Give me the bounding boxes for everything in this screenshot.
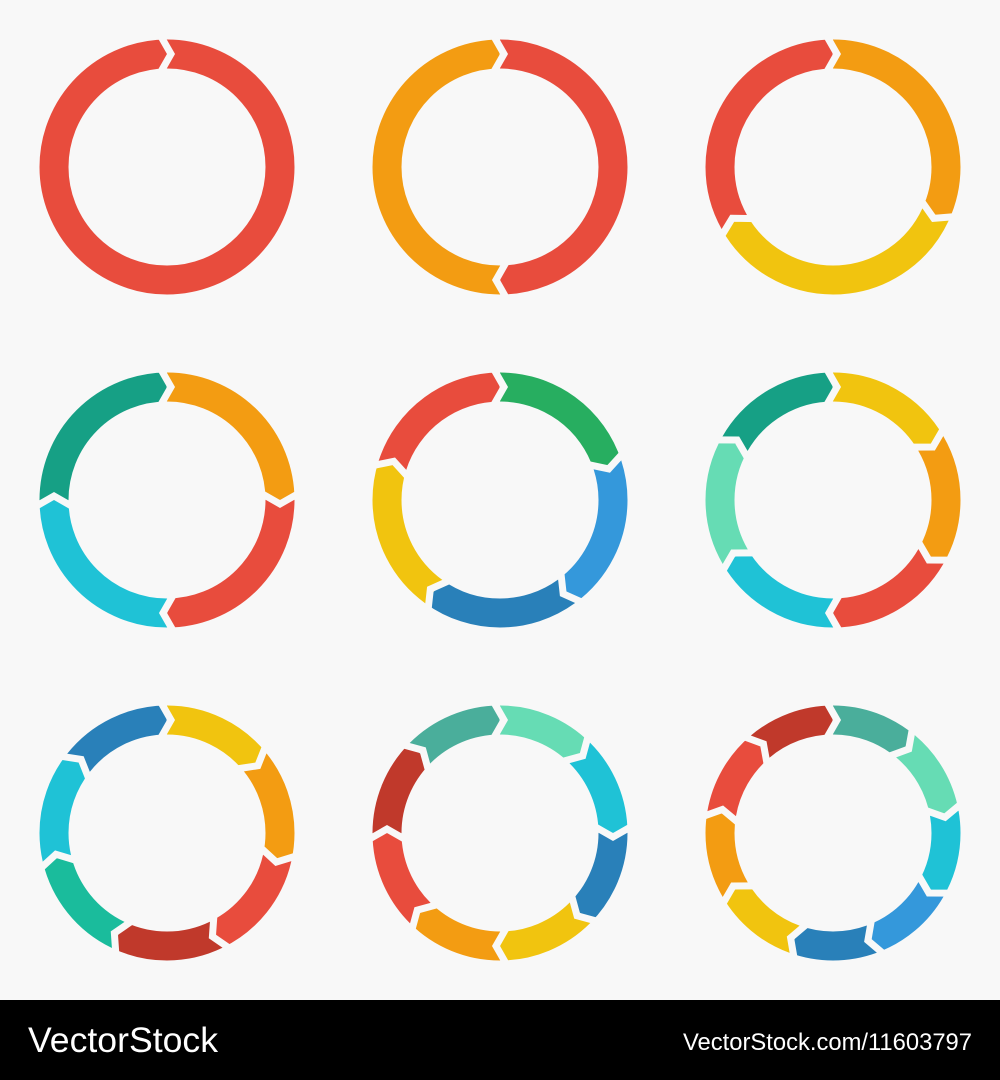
ring 6: six segments <box>713 366 953 634</box>
ring 5: five segments <box>370 366 629 613</box>
ring 7: seven segments <box>35 699 299 957</box>
ring 8: eight segments <box>366 699 634 967</box>
ring 9: nine segments <box>700 699 966 962</box>
footer logo text: VectorStock <box>28 1021 219 1060</box>
ring 2: two segments <box>387 33 613 301</box>
ring 1: single segment <box>54 33 280 280</box>
ring 3: three segments <box>714 33 958 280</box>
footer url text: VectorStock.com/11603797 <box>683 1029 972 1056</box>
footer bar <box>0 1000 1000 1080</box>
ring 4: four segments <box>33 366 301 634</box>
